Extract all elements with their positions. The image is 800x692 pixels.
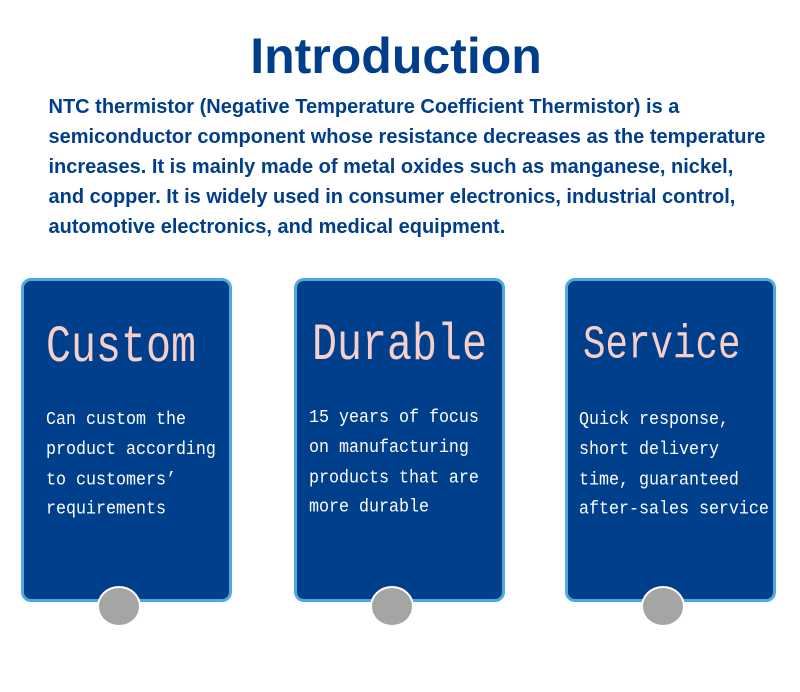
- intro paragraph: increases. It is mainly made of metal oxides such as manganese, nickel,: [48, 156, 733, 178]
- intro paragraph: [48, 96, 765, 238]
- icon: custom circle: [97, 586, 141, 627]
- service text: time, guaranteed: [579, 470, 739, 491]
- panel: custom: [21, 278, 232, 602]
- durable text: products that are: [309, 468, 479, 489]
- intro paragraph: and copper. It is widely used in consumer electronics, industrial control,: [48, 186, 735, 208]
- custom text: Can custom the: [46, 410, 186, 431]
- custom text: to customers’: [46, 470, 176, 491]
- service text: [579, 410, 769, 521]
- durable heading: Durable: [312, 315, 487, 375]
- custom text: product according: [46, 440, 216, 461]
- durable text: 15 years of focus: [309, 408, 479, 429]
- service text: after-sales service: [579, 500, 769, 521]
- durable text: [309, 408, 479, 519]
- title: Introduction: [250, 28, 542, 84]
- service heading: Service: [583, 320, 741, 372]
- panel: service: [565, 278, 776, 602]
- service text: short delivery: [579, 440, 719, 461]
- custom text: [46, 410, 216, 521]
- custom heading: Custom: [46, 317, 196, 377]
- intro paragraph: NTC thermistor (Negative Temperature Coefficient Thermistor) is a: [48, 96, 679, 118]
- custom text: requirements: [46, 500, 166, 521]
- durable text: more durable: [309, 498, 429, 519]
- icon: service circle: [641, 586, 685, 627]
- panel: durable: [294, 278, 505, 602]
- intro paragraph: automotive electronics, and medical equipment.: [48, 216, 505, 238]
- service text: Quick response,: [579, 410, 729, 431]
- durable text: on manufacturing: [309, 438, 469, 459]
- intro paragraph: semiconductor component whose resistance decreases as the temperature: [48, 126, 765, 148]
- icon: durable circle: [370, 586, 414, 627]
